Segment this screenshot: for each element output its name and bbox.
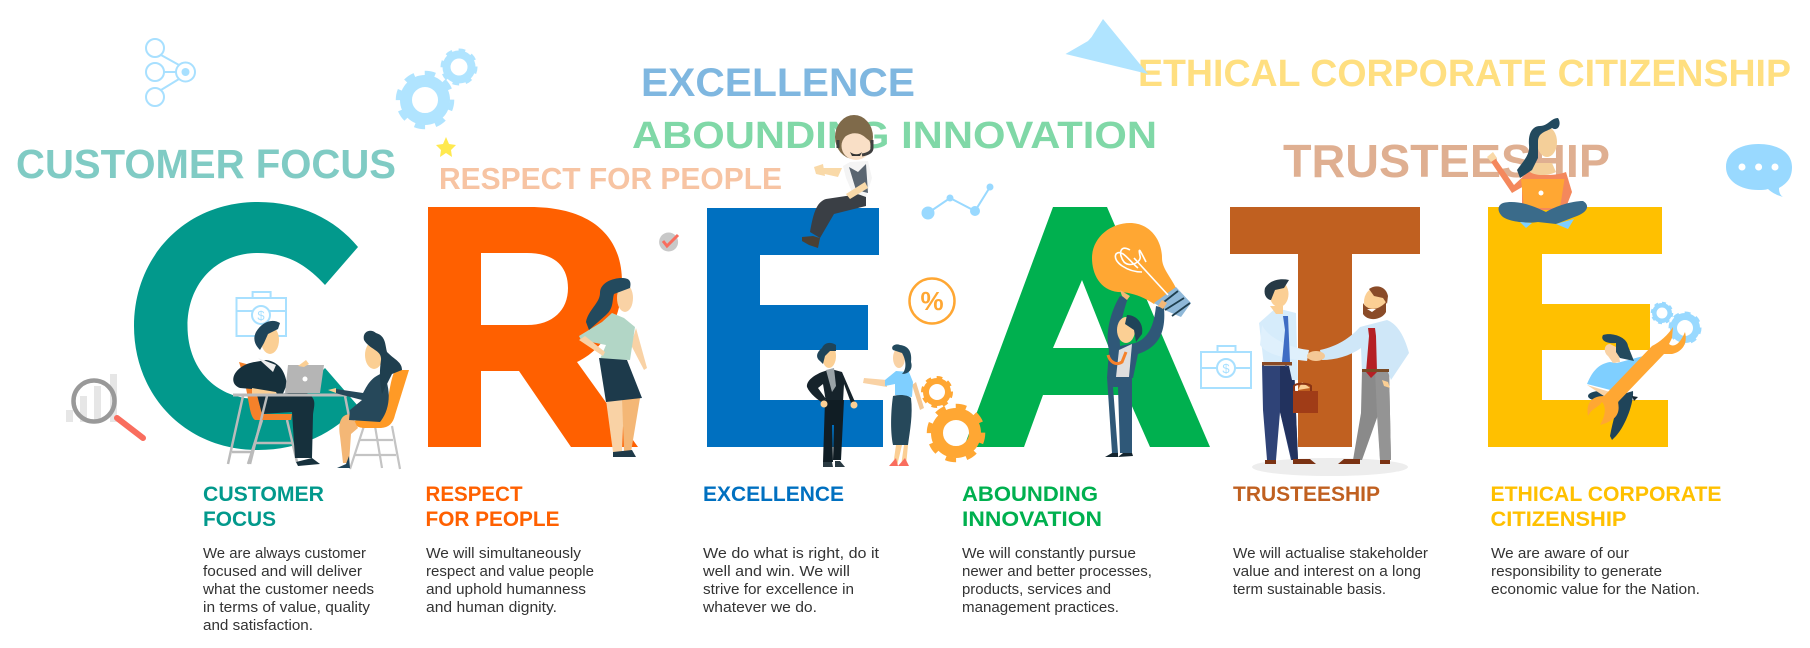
letter C xyxy=(134,202,358,450)
body text: in terms of value, quality xyxy=(203,599,371,616)
column 2: respect for people xyxy=(426,483,594,616)
body text: value and interest on a long xyxy=(1233,563,1421,580)
body text: strive for excellence in xyxy=(703,581,854,598)
body text xyxy=(962,545,1152,616)
faded label: customer focus: CUSTOMER FOCUS xyxy=(16,141,396,187)
illustration: handshake left man xyxy=(1259,279,1318,464)
illustration: woman with laptop on E xyxy=(1487,118,1587,229)
illustration: business man by E xyxy=(807,343,858,467)
illustration: standing woman on R xyxy=(579,278,647,457)
icon: percent: % xyxy=(920,286,944,316)
icon: briefcase right xyxy=(1201,346,1251,388)
heading xyxy=(203,483,324,531)
body text: what the customer needs xyxy=(202,581,374,598)
body text: well and win. We will xyxy=(702,563,850,580)
icon: checkmark badge xyxy=(659,232,678,252)
icon: percent xyxy=(910,278,954,324)
heading xyxy=(426,483,560,531)
icon: briefcase right: $ xyxy=(1222,361,1230,376)
illustration: light bulb xyxy=(1092,223,1191,317)
body text: products, services and xyxy=(962,581,1111,598)
column 6: ethical corporate citizenship xyxy=(1490,483,1722,598)
icon: star xyxy=(436,137,456,157)
body text: and uphold humanness xyxy=(426,581,586,598)
heading xyxy=(962,483,1102,531)
illustration: seated support agent on E xyxy=(802,115,873,248)
heading: FOCUS xyxy=(203,508,276,531)
column 5: trusteeship xyxy=(1233,483,1428,598)
heading: RESPECT xyxy=(426,483,523,506)
faded label: excellence: EXCELLENCE xyxy=(641,61,915,105)
body text: respect and value people xyxy=(426,563,594,580)
man's chair xyxy=(239,362,297,464)
heading xyxy=(1490,483,1722,531)
body text: We are aware of our xyxy=(1491,545,1629,562)
briefcase xyxy=(1293,384,1318,413)
column 4: abounding innovation xyxy=(962,483,1152,616)
body text: We will simultaneously xyxy=(426,545,582,562)
letter T xyxy=(1230,207,1420,447)
icon: magnifier with bars xyxy=(66,374,143,438)
body text xyxy=(1491,545,1700,598)
faded label: respect for people: RESPECT FOR PEOPLE xyxy=(439,161,782,196)
icon: briefcase left: $ xyxy=(257,308,265,323)
illustration: woman with wrench and gears xyxy=(1587,303,1700,440)
table xyxy=(228,394,352,464)
letter A xyxy=(964,207,1210,447)
faded label: trusteeship: TRUSTEESHIP xyxy=(1283,135,1610,187)
body text: whatever we do. xyxy=(702,599,817,616)
illustration: handshake right man xyxy=(1320,286,1409,464)
letter E blue xyxy=(707,208,883,447)
letter E yellow xyxy=(1488,207,1668,447)
body text: We are always customer xyxy=(203,545,366,562)
icon: paper plane xyxy=(1066,19,1148,74)
laptop xyxy=(285,360,324,393)
illustration: customer meeting at table xyxy=(228,321,409,469)
column 1: customer focus xyxy=(202,483,374,634)
heading: CITIZENSHIP xyxy=(1490,508,1626,531)
body text xyxy=(702,545,880,616)
body text xyxy=(202,545,374,634)
column 3: excellence xyxy=(702,483,880,616)
icon: small blue gears xyxy=(1652,303,1700,343)
illustration: man holding bulb xyxy=(1105,290,1167,457)
body text: and human dignity. xyxy=(426,599,557,616)
icon: line chart xyxy=(922,184,993,219)
body text: economic value for the Nation. xyxy=(1491,581,1700,598)
icon: speech bubble xyxy=(1726,144,1792,197)
woman xyxy=(328,331,402,468)
body text: and satisfaction. xyxy=(203,617,313,634)
heading: CUSTOMER xyxy=(203,483,324,506)
heading: ETHICAL CORPORATE xyxy=(1490,483,1722,506)
faded label: ethical corporate citizenship: ETHICAL CORPORATE CITIZENSHIP xyxy=(1138,53,1791,95)
man xyxy=(233,321,320,466)
illustration: handshake xyxy=(1307,351,1325,361)
heading: INNOVATION xyxy=(962,508,1102,531)
letter R xyxy=(428,207,638,447)
icon: orange gears xyxy=(922,378,983,460)
body text: management practices. xyxy=(962,599,1119,616)
illustration: ground shadow xyxy=(1252,458,1408,476)
icon: briefcase left xyxy=(236,292,286,336)
body text: newer and better processes, xyxy=(962,563,1152,580)
faded label: abounding innovation: ABOUNDING INNOVATION xyxy=(632,115,1157,157)
body text: We do what is right, do it xyxy=(703,545,880,562)
woman's chair xyxy=(350,370,409,469)
body text xyxy=(1233,545,1428,598)
heading: FOR PEOPLE xyxy=(426,508,560,531)
heading: EXCELLENCE xyxy=(703,483,844,506)
body text: term sustainable basis. xyxy=(1233,581,1386,598)
icon: network nodes xyxy=(146,39,195,106)
body text: We will constantly pursue xyxy=(962,545,1136,562)
body text: We will actualise stakeholder xyxy=(1233,545,1428,562)
body text: responsibility to generate xyxy=(1491,563,1662,580)
body text xyxy=(426,545,594,616)
heading: TRUSTEESHIP xyxy=(1233,483,1380,506)
heading: ABOUNDING xyxy=(962,483,1098,506)
body text: focused and will deliver xyxy=(203,563,362,580)
illustration: business woman by E xyxy=(863,344,924,466)
icon: blue gears xyxy=(398,50,476,127)
